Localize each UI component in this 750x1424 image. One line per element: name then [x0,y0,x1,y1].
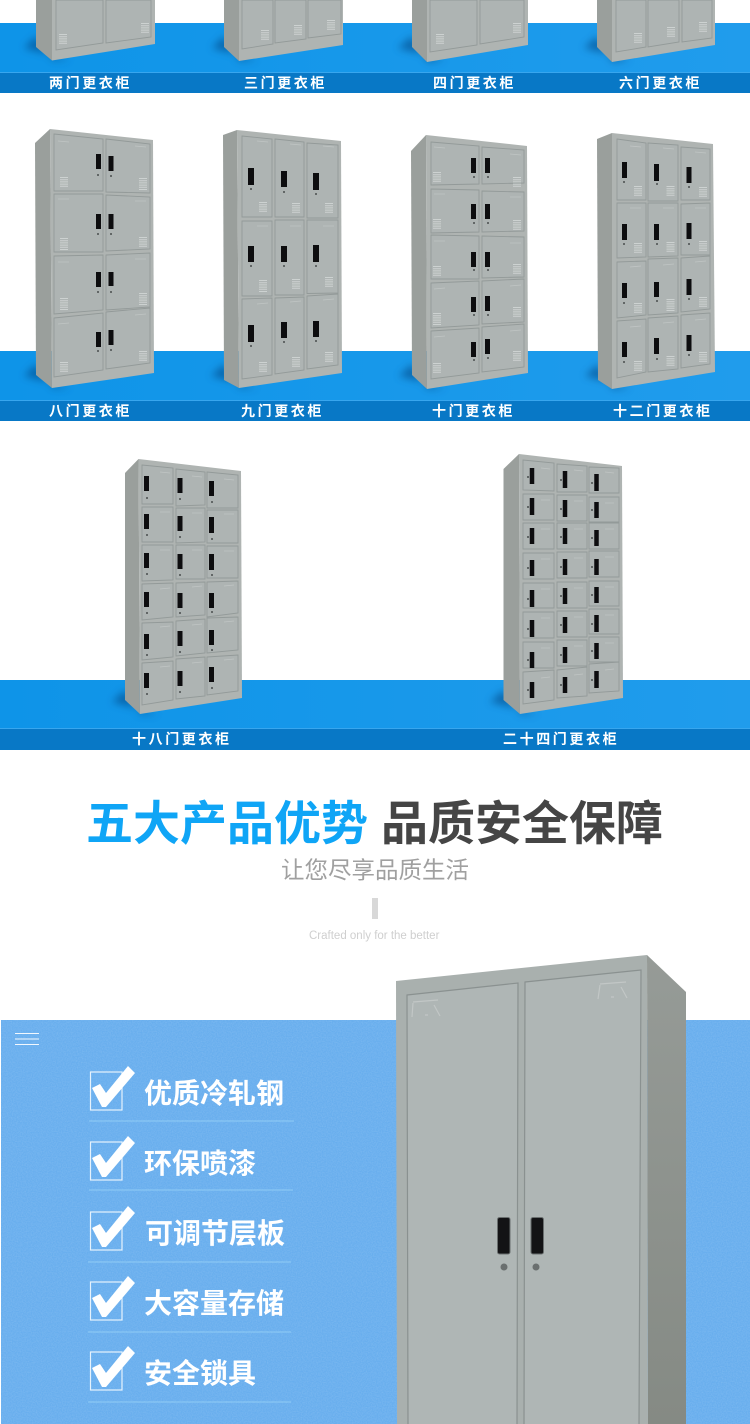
feature: adjustable shelves [88,1206,291,1262]
row 3: cabinets [0,454,750,750]
cabinet: six doors [584,0,715,62]
labels row 1: 六门更衣柜 [619,75,702,91]
labels row 3 [132,731,619,747]
large two-door cabinet [396,955,686,1424]
left handle [498,1218,510,1254]
labels row 2: 八门更衣柜 [49,403,132,419]
cabinet side [647,955,686,1424]
cabinet: three doors [212,0,343,61]
subtitle: 让您尽享品质生活 [281,857,469,883]
labels row 1 [49,75,702,91]
labels row 2: 十二门更衣柜 [613,403,713,419]
labels row 3: 十八门更衣柜 [132,731,232,747]
feature: adjustable shelves: 可调节层板 [145,1218,285,1249]
feature: safety lock [88,1346,291,1402]
blue floor row 3 [0,680,750,750]
feature: eco paint: 环保喷漆 [144,1148,256,1179]
left lock [500,1264,508,1270]
feature: cold rolled steel: 优质冷轧钢 [144,1078,284,1109]
panel: product advantages [1,1020,750,1424]
feature: large capacity [88,1276,291,1332]
title [86,797,663,850]
feature: eco paint [89,1136,293,1190]
feature: large capacity: 大容量存储 [144,1288,284,1319]
labels row 2: 九门更衣柜 [241,403,324,419]
right lock [532,1264,540,1270]
left door badge [412,1000,440,1017]
feature: safety lock: 安全锁具 [144,1358,256,1389]
cabinet: four doors [398,0,528,62]
feature: cold rolled steel [89,1066,294,1121]
blue floor row 2 [0,351,750,421]
right door [524,970,641,1424]
labels row 2: 十门更衣柜 [432,403,515,419]
labels row 1: 两门更衣柜 [49,75,132,91]
title: 五大产品优势 [86,797,368,850]
small vertical bar [372,898,378,919]
panel background [1,1020,750,1424]
english tagline: Crafted only for the better [309,930,440,942]
title: 品质安全保障 [381,797,663,850]
labels row 3: 二十四门更衣柜 [503,731,619,747]
heading block [86,797,663,942]
cabinet front [396,955,648,1424]
cabinet: ten doors [399,135,528,389]
cabinet: eight doors [24,129,154,388]
labels row 2 [49,403,713,419]
right door badge [598,982,627,999]
cabinet: two doors [24,0,155,60]
cabinet: eighteen doors [112,459,242,714]
icon: menu lines [15,1034,39,1044]
cabinet: twelve doors [585,133,715,389]
row 1: partial cabinets [0,0,750,93]
blue floor row 1 [0,23,750,93]
right handle [531,1218,544,1254]
cabinet: twenty-four doors [490,454,623,714]
left door [407,983,518,1424]
labels row 1: 四门更衣柜 [433,75,516,91]
row 2: cabinets [0,129,750,421]
cabinet: nine doors [211,130,342,388]
labels row 1: 三门更衣柜 [244,75,327,91]
